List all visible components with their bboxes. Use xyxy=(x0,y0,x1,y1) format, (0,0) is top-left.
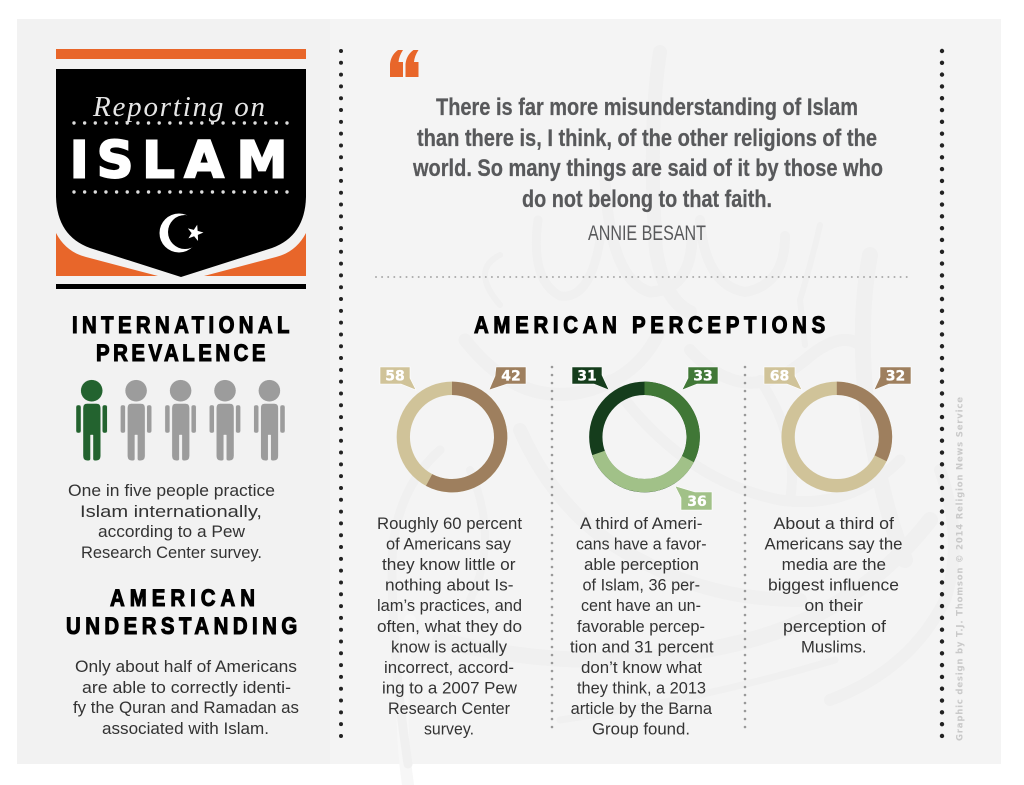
text: international prevalence: One in five people practice xyxy=(68,482,275,500)
text: column one: lam’s practices, and xyxy=(377,597,522,615)
heading: international prevalence: INTERNATIONAL xyxy=(72,311,294,338)
text: column three xyxy=(764,515,902,656)
icon: person 5 xyxy=(254,380,285,461)
text: international prevalence: Research Center survey. xyxy=(81,544,262,562)
orange banner corners xyxy=(56,233,306,276)
text: column two: cans have a favor- xyxy=(576,536,706,554)
segment: 42 xyxy=(429,388,501,486)
title badge xyxy=(56,49,306,289)
text: column three: on their xyxy=(804,597,864,615)
left dotted divider xyxy=(339,51,343,737)
text: column three: Americans say the xyxy=(764,536,902,554)
pictogram: one in five people xyxy=(76,380,285,461)
donut chart: perception of Islam xyxy=(596,388,693,486)
heading: american understanding: UNDERSTANDING xyxy=(66,612,302,639)
segment: 32 xyxy=(837,388,886,458)
text: column one: often, what they do xyxy=(377,618,522,636)
text: column three: Muslims. xyxy=(801,638,866,656)
calligraphy watermark xyxy=(392,52,954,785)
callout: 42: 42 xyxy=(501,368,521,384)
quote: world. So many things are said of it by those who xyxy=(412,155,883,182)
callout: 31 xyxy=(572,367,609,390)
dotted rule lower xyxy=(74,190,288,194)
black shield xyxy=(56,69,306,277)
text: column one: of Americans say xyxy=(386,536,512,554)
text: american understanding: Only about half of Americans xyxy=(75,658,297,676)
callout: 32: 32 xyxy=(886,368,905,384)
callout: 31: 31 xyxy=(577,368,597,384)
text: column two: they think, a 2013 xyxy=(577,679,706,697)
text: column two: A third of Ameri- xyxy=(580,515,702,533)
callout: 68: 68 xyxy=(770,368,789,384)
icon: person 2 xyxy=(120,380,152,461)
callout: 68 xyxy=(764,367,802,390)
text: column two: able perception xyxy=(584,556,699,574)
text: column one: Roughly 60 percent xyxy=(377,515,522,533)
quote: do not belong to that faith. xyxy=(522,186,772,213)
text: column three: About a third of xyxy=(774,515,894,533)
heading: international prevalence xyxy=(72,311,294,366)
donut chart: media influence xyxy=(788,388,886,486)
right dotted divider xyxy=(940,51,944,737)
text: international prevalence: according to a Pew xyxy=(98,523,245,541)
text: american understanding: fy the Quran and Ramadan as xyxy=(73,699,299,717)
text: column two: cent have an un- xyxy=(581,597,701,615)
text: column three: media are the xyxy=(782,556,886,574)
text: column two: don’t know what xyxy=(581,659,702,677)
black bottom bar xyxy=(56,284,306,289)
text: international prevalence: Islam internationally, xyxy=(80,503,262,521)
segment: 33 xyxy=(644,388,693,459)
credit line: Graphic design by T.J. Thomson © 2014 Religion News Service xyxy=(956,397,966,741)
donut chart: knowledge of Islam xyxy=(403,388,501,486)
segment: 36 xyxy=(599,453,688,486)
icon: crescent and star xyxy=(160,214,205,252)
heading: american understanding xyxy=(66,584,302,639)
icon: highlighted person xyxy=(76,380,107,461)
callout: 36: 36 xyxy=(687,494,707,510)
text: column two: article by the Barna xyxy=(571,700,713,718)
icon: quotation mark xyxy=(390,50,418,77)
quote attribution: ANNIE BESANT xyxy=(588,222,706,245)
callout: 42 xyxy=(489,367,526,390)
callout: 58 xyxy=(380,367,416,390)
text: column one: incorrect, accord- xyxy=(384,659,514,677)
callout: 33: 33 xyxy=(693,368,713,384)
text: column three: perception of xyxy=(783,618,886,636)
callout: 36 xyxy=(675,486,712,510)
icon: person 4 xyxy=(209,380,241,461)
text: column one: know is actually xyxy=(391,638,508,656)
quote xyxy=(412,94,883,213)
text: column two xyxy=(570,515,714,738)
title: Reporting on: Reporting on xyxy=(92,91,265,123)
callout: 33 xyxy=(682,367,718,390)
title: ISLAM: ISLAM xyxy=(70,132,287,190)
text: international prevalence xyxy=(68,482,275,562)
heading: american perceptions: AMERICAN PERCEPTIONS xyxy=(474,311,830,338)
text: column two: of Islam, 36 per- xyxy=(582,577,700,595)
dotted rule upper xyxy=(74,121,288,125)
text: column one: ing to a 2007 Pew xyxy=(382,679,517,697)
text: column one: they know little or xyxy=(382,556,516,574)
text: column two: tion and 31 percent xyxy=(570,638,714,656)
text: column one: survey. xyxy=(424,720,474,738)
icon: person 3 xyxy=(165,380,196,461)
quote: than there is, I think, of the other religions of the xyxy=(417,125,877,152)
text: american understanding xyxy=(73,658,299,738)
text: column two: Group found. xyxy=(592,720,690,738)
heading: american understanding: AMERICAN xyxy=(110,584,260,611)
text: column one: Research Center xyxy=(388,700,510,718)
callout: 32 xyxy=(874,367,911,390)
text: american understanding: associated with Islam. xyxy=(102,720,269,738)
orange top bar xyxy=(56,49,306,59)
text: column one xyxy=(377,515,522,738)
text: column two: favorable percep- xyxy=(577,618,705,636)
text: column one: nothing about Is- xyxy=(385,577,514,595)
text: american understanding: are able to correctly identi- xyxy=(82,679,291,697)
quote: There is far more misunderstanding of Islam xyxy=(436,94,858,121)
text: column three: biggest influence xyxy=(768,577,899,595)
heading: international prevalence: PREVALENCE xyxy=(96,339,269,366)
callout: 58: 58 xyxy=(385,368,405,384)
